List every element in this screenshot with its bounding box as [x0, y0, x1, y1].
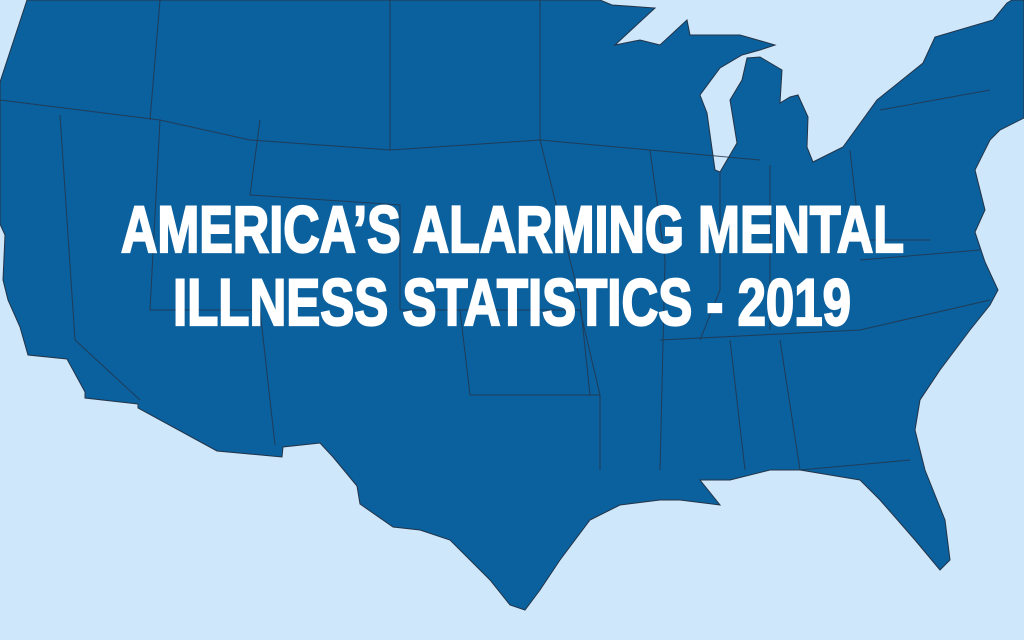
title [121, 192, 904, 339]
